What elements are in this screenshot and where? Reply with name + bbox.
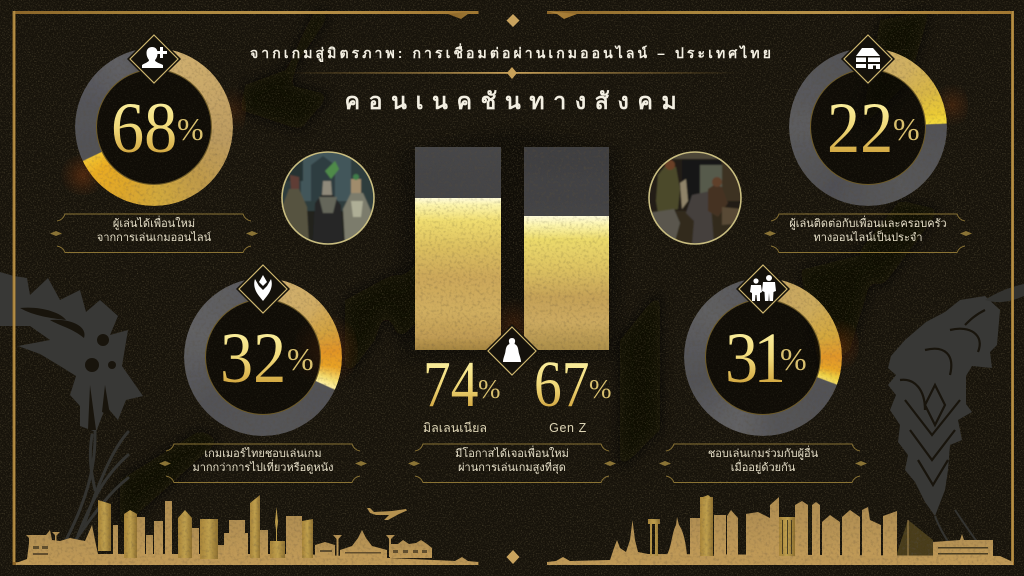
caption: ทางออนไลน์เป็นประจำ: [813, 232, 922, 244]
subtitle: จากเกมสู่มิตรภาพ: การเชื่อมต่อผ่านเกมออนไลน์ – ประเทศไทย: [250, 45, 774, 61]
panel: 68% new friends: [50, 33, 258, 253]
caption: เมื่ออยู่ด้วยกัน: [731, 462, 795, 474]
skyline: right Bangkok silhouette: [547, 495, 1013, 565]
fire glow between bars: [498, 290, 528, 360]
fire glow: [936, 80, 968, 130]
percent sign: %: [589, 374, 612, 404]
skyline: left Bangkok silhouette: [16, 495, 478, 565]
value 32: 32: [220, 318, 286, 398]
panel: generation comparison: [408, 147, 616, 483]
icon: seated figure badge: [486, 324, 538, 378]
percent sign: %: [478, 374, 500, 404]
caption: ผ่านการเล่นเกมสูงที่สุด: [458, 462, 566, 474]
percent sign: %: [780, 341, 807, 377]
watermark: left dragon crest: [0, 272, 143, 540]
image: riders on horses: [648, 151, 742, 245]
icon: add friend badge: [127, 33, 181, 84]
caption: จากการเล่นเกมออนไลน์: [97, 232, 211, 244]
main heading: คอนเนคชันทางสังคม: [345, 88, 685, 114]
bar: Gen Z 67 percent: [524, 147, 609, 350]
caption: [159, 444, 367, 483]
icon: airplane: [367, 508, 407, 520]
panel: 32% prefer games over outings: [159, 263, 367, 483]
value 68: 68: [111, 88, 177, 168]
donut ring 31 percent: [684, 278, 842, 436]
value 31: 31: [725, 318, 782, 398]
fire glow: [294, 310, 358, 390]
fire glow: [815, 315, 859, 375]
label: Gen Z: Gen Z: [549, 421, 587, 435]
caption: ชอบเล่นเกมร่วมกับผู้อื่น: [708, 448, 818, 460]
fire glow: [58, 155, 108, 195]
caption: [764, 214, 972, 253]
donut ring 68 percent: [75, 48, 233, 206]
value 74: 74: [423, 348, 478, 421]
percent sign: %: [893, 111, 920, 147]
percent sign: %: [287, 341, 314, 377]
caption: มีโอกาสได้เจอเพื่อนใหม่: [455, 448, 569, 460]
donut ring 32 percent: [184, 278, 342, 436]
label: millennials: มิลเลนเนียล: [423, 421, 487, 435]
watermark: right lion crest: [888, 284, 1024, 541]
caption: ผู้เล่นติดต่อกับเพื่อนและครอบครัว: [789, 218, 947, 230]
percent sign: %: [177, 111, 204, 147]
bar: millennials 74 percent: [415, 147, 501, 350]
caption: [659, 444, 867, 483]
title block: [250, 43, 774, 114]
image: game characters group: [281, 151, 375, 245]
caption: เกมเมอร์ไทยชอบเล่นเกม: [204, 448, 322, 460]
icon: crest badge: [236, 263, 290, 314]
value 22: 22: [827, 88, 893, 168]
icon: houses badge: [841, 33, 895, 86]
caption: มากกว่าการไปเที่ยวหรือดูหนัง: [192, 462, 334, 474]
panel: 31% play together: [659, 262, 867, 483]
icon: family badge: [736, 262, 790, 314]
caption: [50, 214, 258, 253]
panel: 22% contact friends and family: [764, 33, 972, 253]
value 67: 67: [534, 348, 589, 421]
donut ring 22 percent: [789, 48, 947, 206]
caption: [408, 444, 616, 483]
caption: ผู้เล่นได้เพื่อนใหม่: [113, 218, 195, 230]
